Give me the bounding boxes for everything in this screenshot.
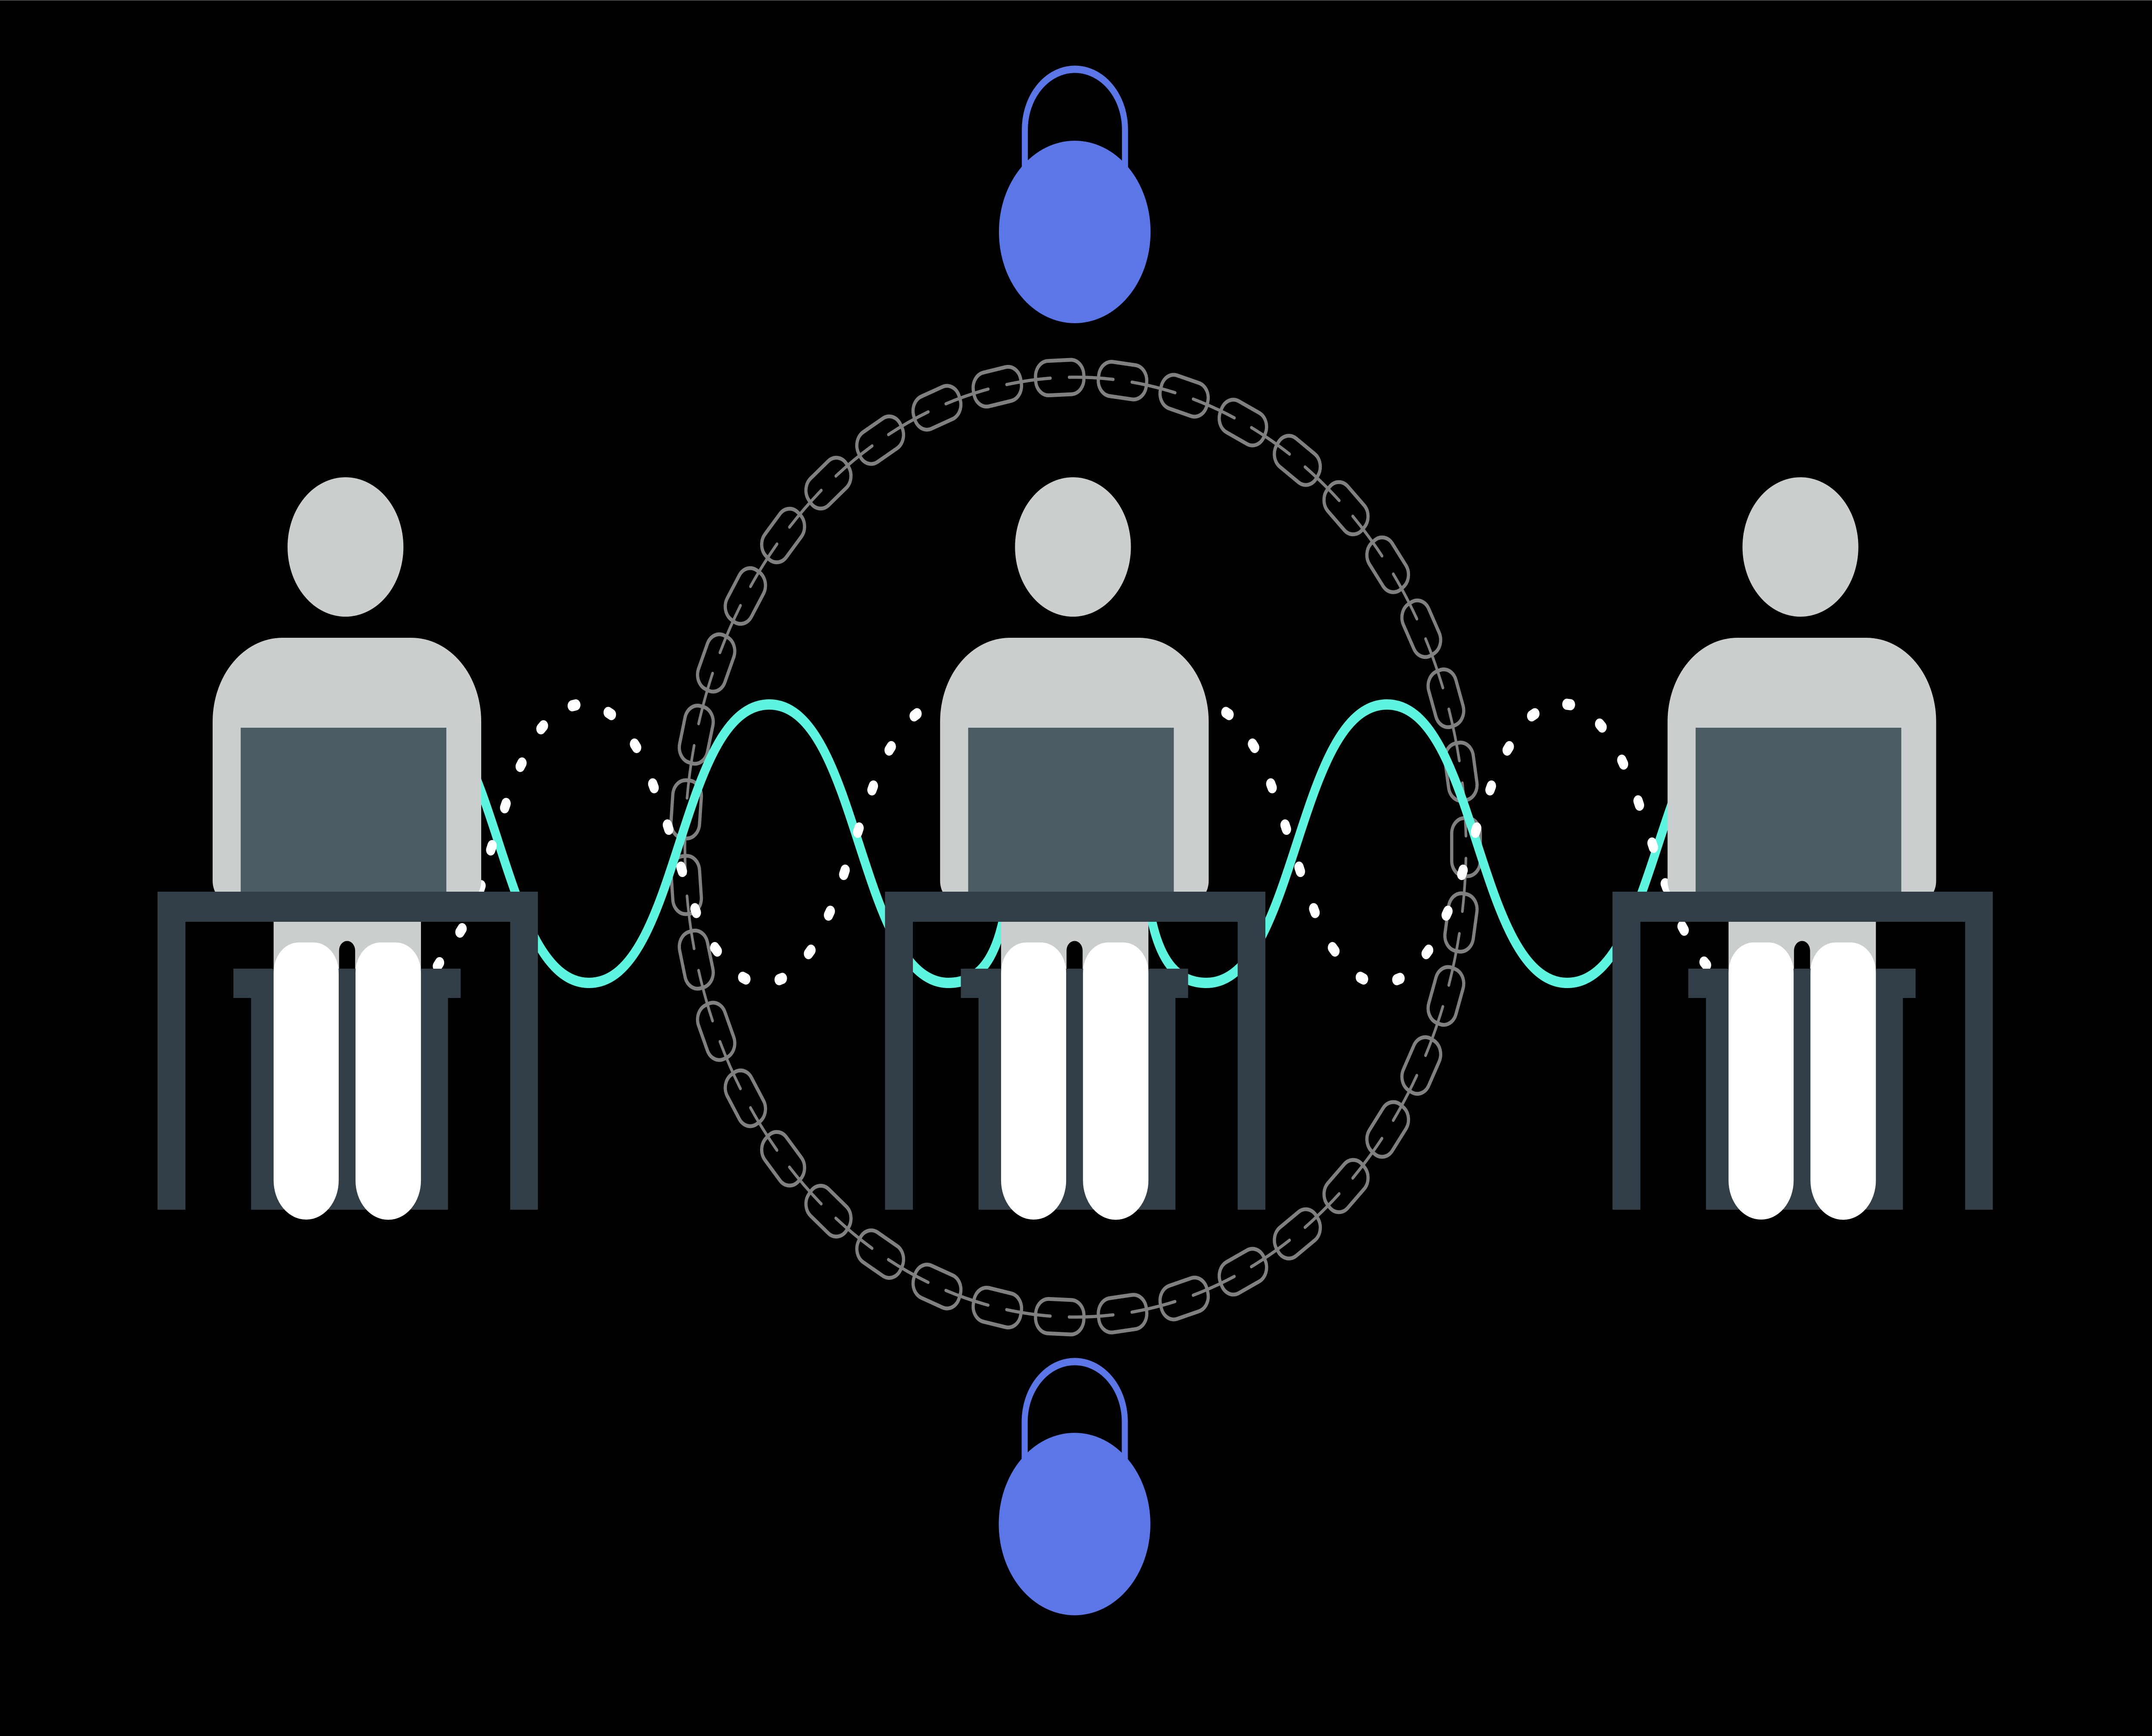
person at desk: right [1612, 477, 1993, 1220]
lap [274, 917, 421, 970]
icon: top padlock [999, 69, 1150, 323]
icon: bottom padlock [999, 1362, 1150, 1616]
laptop [241, 728, 446, 900]
head [288, 477, 403, 617]
gap between legs [339, 941, 355, 970]
teal solid wave [409, 704, 1750, 983]
person at desk: centre [885, 477, 1265, 1220]
left leg [274, 942, 339, 1220]
white dotted wave [437, 704, 1707, 979]
chain ring [491, 337, 1496, 1494]
desk [158, 892, 538, 1210]
chair [233, 969, 461, 1210]
person at desk: left [158, 477, 538, 1220]
torso [213, 638, 481, 902]
right leg [356, 942, 421, 1220]
